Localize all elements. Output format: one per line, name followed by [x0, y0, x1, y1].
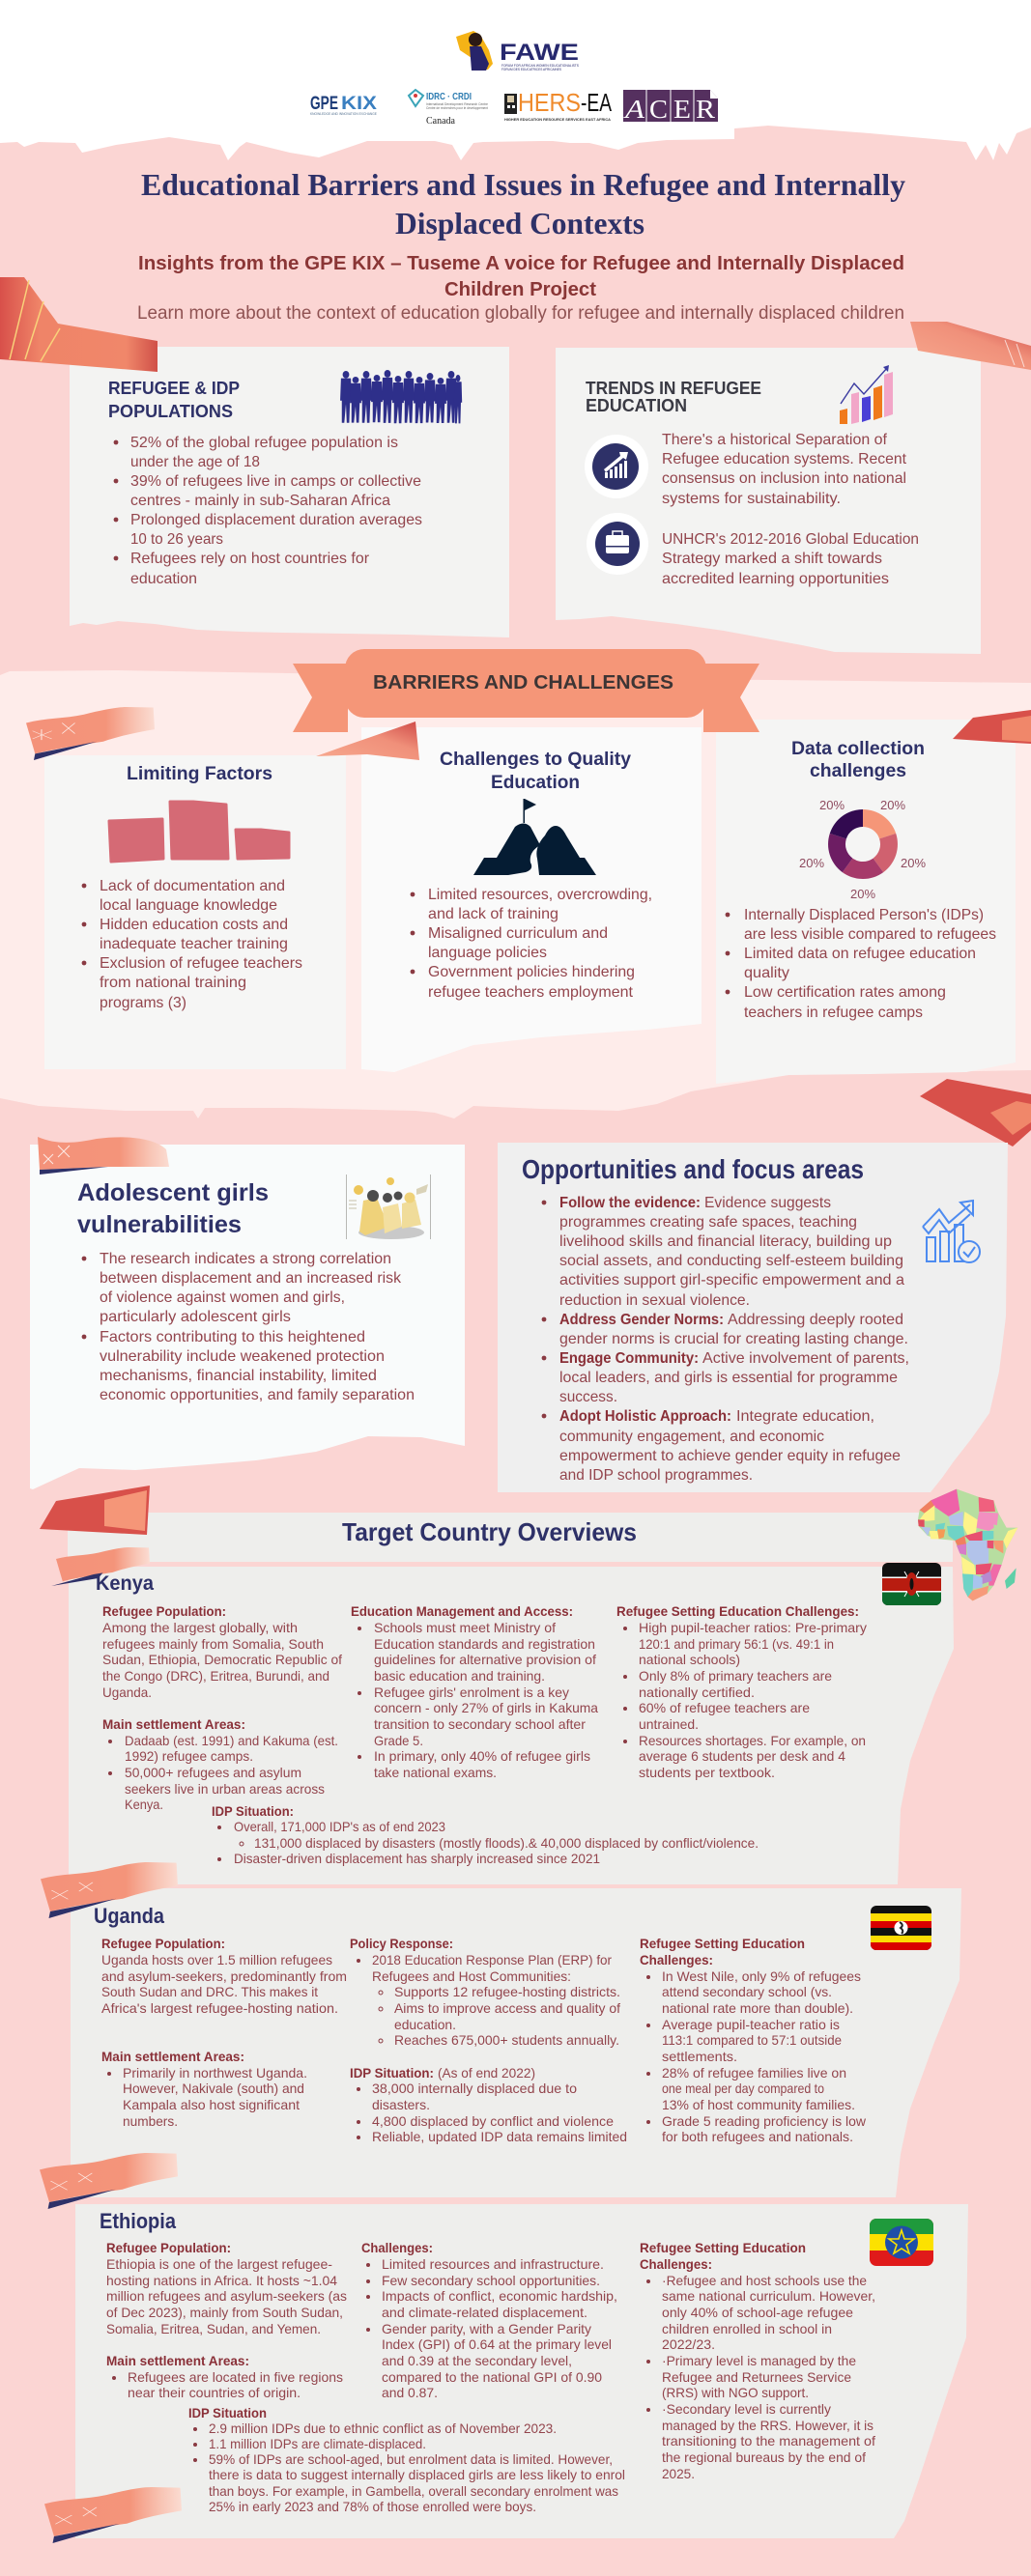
- heading: [586, 378, 761, 415]
- panel: opportunities and focus areas: [498, 1143, 1008, 1492]
- bullet list: economic opportunities, and family separation: [100, 1387, 415, 1403]
- column: policy response and IDP situation: Reaches 675,000+ students annually.: [394, 2033, 619, 2048]
- heading: Data collection: [791, 739, 925, 759]
- bullet list: centres - mainly in sub-Saharan Africa: [130, 493, 390, 509]
- column: refugee population and settlement: [101, 1937, 347, 2129]
- bullet list: [82, 1251, 415, 1403]
- logo: GPE KIX: GPE: [310, 94, 338, 114]
- icon: Kenya flag: [882, 1563, 941, 1605]
- heading: [77, 1179, 269, 1238]
- subtitle: [138, 253, 904, 300]
- bullet list: Prolonged displacement duration averages: [130, 512, 422, 528]
- column: education management and access: Education standards and registration: [374, 1637, 595, 1652]
- column: refugee setting challenges: the regional bureaus by the end of: [662, 2450, 866, 2465]
- column: refugee setting challenges: [640, 1937, 866, 2144]
- column: refugee setting challenges: 2022/23.: [662, 2337, 715, 2352]
- text: UNHCR strategy: [662, 531, 919, 587]
- column: policy response and IDP situation: Aims to improve access and quality of: [394, 2001, 620, 2016]
- icon: mountain with flag: [473, 799, 596, 875]
- bullet list: success.: [559, 1389, 617, 1405]
- column: refugee population and settlement: 1992) refugee camps.: [125, 1749, 253, 1764]
- column: challenges: and 0.87.: [382, 2386, 438, 2400]
- bullet list: livelihood skills and financial literacy, building up: [559, 1233, 892, 1250]
- bullet list: The research indicates a strong correlation: [100, 1251, 391, 1267]
- chart: donut: [799, 798, 926, 901]
- bullet list: [114, 435, 422, 587]
- column: refugee population and settlement: Uganda.: [102, 1685, 152, 1700]
- bullet list: [726, 907, 996, 1021]
- logo: IDRC CRDI Canada: Canada: [426, 116, 456, 127]
- column: refugee population and settlement: near their countries of origin.: [128, 2386, 301, 2400]
- column: refugee setting challenges: average 6 students per desk and 4: [639, 1749, 845, 1764]
- column: refugee setting challenges: High pupil-teacher ratios: Pre-primary: [639, 1621, 867, 1635]
- brush: Uganda corner: [41, 1862, 178, 1918]
- heading: Kenya: [96, 1572, 154, 1595]
- bullet list: programmes creating safe spaces, teaching: [559, 1214, 857, 1231]
- bullet list: [542, 1195, 909, 1484]
- heading: [791, 739, 925, 781]
- title: Displaced Contexts: [395, 206, 644, 241]
- column: refugee population and settlement: Main settlement Areas:: [101, 2050, 244, 2064]
- logo: HERS-EA: HIGHER EDUCATION RESOURCE SERVICES EAST AFRICA: [504, 117, 611, 122]
- bullet list: and IDP school programmes.: [559, 1467, 753, 1484]
- bullet list: Government policies hindering: [428, 964, 635, 980]
- icon: crowd silhouette: [340, 370, 462, 423]
- bullet list: vulnerability include weakened protection: [100, 1348, 385, 1365]
- column: education management and access: concern - only 27% of girls in Kakuma: [374, 1701, 598, 1715]
- column: education management and access: Schools must meet Ministry of: [374, 1621, 556, 1635]
- intro line: Learn more about the context of education globally for refugee and internally displaced children: [137, 303, 904, 324]
- column: challenges: and 0.39 at the secondary level,: [382, 2354, 572, 2368]
- column: refugee population and settlement: [106, 2241, 347, 2400]
- column: policy response and IDP situation: Supports 12 refugee-hosting districts.: [394, 1985, 620, 1999]
- column: refugee setting challenges: national rate more than double).: [662, 2001, 853, 2016]
- column: refugee population and settlement: However, Nakivale (south) and: [123, 2081, 304, 2096]
- panel: Ethiopia: [75, 2204, 968, 2538]
- donut labels: 20%: [799, 856, 824, 870]
- column: refugee setting challenges: Challenges:: [640, 1953, 713, 1967]
- column: refugee setting challenges: nationally certified.: [639, 1685, 755, 1700]
- column: refugee population and settlement: Refugees are located in five regions: [128, 2370, 343, 2385]
- bullet list: Refugees rely on host countries for: [130, 551, 370, 567]
- bullet list: Factors contributing to this heightened: [100, 1329, 365, 1345]
- brush: target red: [40, 1486, 150, 1535]
- column: refugee population and settlement: 50,000+ refugees and asylum: [125, 1766, 301, 1780]
- logo: GPE KIX: KIX: [341, 94, 377, 114]
- panel: Uganda: [71, 1888, 961, 2197]
- bullet list: quality: [744, 965, 789, 981]
- column: refugee setting challenges: [640, 2241, 875, 2481]
- heading: Education: [491, 773, 580, 793]
- heading: Uganda: [94, 1904, 165, 1928]
- title: Educational Barriers and Issues in Refugee and Internally: [141, 167, 905, 202]
- column: refugee population and settlement: Africa's largest refugee-hosting nation.: [101, 2001, 338, 2016]
- text: separation of systems: There's a historical Separation of: [662, 432, 888, 448]
- column: policy response and IDP situation: IDP Situation:: [350, 2066, 434, 2081]
- logo: HERS-EA: HERS: [518, 88, 581, 117]
- bullet list: teachers in refugee camps: [744, 1005, 923, 1021]
- column: refugee setting challenges: children enrolled in school in: [662, 2322, 832, 2336]
- brush: Kenya corner: [51, 1547, 150, 1586]
- block: IDP situation: 25% in early 2023 and 78% of those enrolled were boys.: [209, 2500, 536, 2514]
- column: refugee population and settlement: Refugee Population:: [106, 2241, 231, 2255]
- column: education management and access: [351, 1604, 598, 1780]
- column: refugee population and settlement: Ethiopia is one of the largest refugee-: [106, 2257, 332, 2272]
- column: refugee population and settlement: and asylum-seekers, predominantly from: [101, 1969, 347, 1984]
- logo: FAWE: FAWE: [500, 40, 579, 66]
- bullet list: 39% of refugees live in camps or collective: [130, 473, 421, 490]
- block: IDP situation: there is data to suggest internally displaced girls are less likely to enrol: [209, 2468, 625, 2482]
- logo: HERS-EA: -EA: [581, 88, 612, 117]
- column: education management and access: take national exams.: [374, 1766, 497, 1780]
- brush: limiting factors: [26, 707, 155, 760]
- heading: Target Country Overviews: [342, 1517, 637, 1546]
- icon: Uganda flag: [871, 1906, 931, 1950]
- brush: challenges corner: [316, 722, 419, 760]
- column: challenges: and climate-related displacement.: [382, 2306, 587, 2320]
- logo: FAWE: [456, 31, 580, 71]
- bullet list: Limited data on refugee education: [744, 946, 976, 962]
- column: policy response and IDP situation: (As of end 2022): [438, 2066, 535, 2081]
- text: separation of systems: consensus on inclusion into national: [662, 470, 906, 487]
- column: refugee population and settlement: numbers.: [123, 2114, 178, 2129]
- heading: Adolescent girls: [77, 1179, 269, 1206]
- bullet list: mechanisms, financial instability, limited: [100, 1368, 377, 1384]
- section banner: barriers and challenges: BARRIERS AND CHALLENGES: [373, 672, 673, 694]
- column: refugee population and settlement: of Dec 2023), mainly from South Sudan,: [106, 2306, 343, 2320]
- logo: IDRC CRDI Canada: [409, 90, 488, 127]
- bullet list: social assets, and conducting self-esteem building: [559, 1253, 903, 1269]
- bullet list: 10 to 26 years: [130, 531, 223, 548]
- bullet list: [411, 887, 652, 1001]
- column: refugee setting challenges: 28% of refugee families live on: [662, 2066, 846, 2081]
- subtitle: Insights from the GPE KIX – Tuseme A voice for Refugee and Internally Displaced: [138, 253, 904, 274]
- logo: FAWE: FORUM DES EDUCATRICES AFRICAINES: [501, 68, 562, 71]
- panel: trends in refugee education: [556, 348, 981, 654]
- bullet list: local leaders, and girls is essential for programme: [559, 1370, 898, 1386]
- column: refugee setting challenges: ·Secondary level is currently: [662, 2402, 831, 2417]
- column: refugee setting challenges: 113:1 compared to 57:1 outside: [662, 2033, 842, 2048]
- logo: ACER: R: [696, 95, 715, 124]
- brush: adolescent corner: [38, 1137, 169, 1175]
- bullet list: Address Gender Norms:: [559, 1312, 724, 1328]
- block: IDP situation: than boys. For example, in Gambella, overall secondary enrolment was: [209, 2484, 618, 2499]
- logo: FAWE: FORUM FOR AFRICAN WOMEN EDUCATIONALISTS: [501, 64, 580, 68]
- column: challenges: Gender parity, with a Gender Parity: [382, 2322, 591, 2336]
- chart: three block bars: [109, 802, 289, 862]
- column: refugee population and settlement: South Sudan and DRC. This makes it: [101, 1985, 318, 1999]
- logo: IDRC CRDI Canada: Centre de recherches pour le développement: [426, 106, 488, 110]
- column: refugee setting challenges: Challenges:: [640, 2257, 712, 2272]
- bullet list: Exclusion of refugee teachers: [100, 955, 302, 972]
- donut labels: 20%: [901, 856, 926, 870]
- icon: seated girls illustration: [346, 1175, 431, 1239]
- logo: ACER: C: [649, 95, 668, 124]
- subtitle: Children Project: [444, 279, 596, 300]
- column: policy response and IDP situation: Refugees and Host Communities:: [372, 1969, 571, 1984]
- icon: Africa map: [918, 1489, 1017, 1600]
- logo: GPE KIX: [310, 94, 378, 116]
- block: IDP situation: Overall, 171,000 IDP's as of end 2023: [234, 1820, 445, 1834]
- bullet list: Evidence suggests: [704, 1195, 831, 1211]
- column: refugee setting challenges: one meal per day compared to: [662, 2081, 824, 2096]
- column: refugee setting challenges: (RRS) with NGO support.: [662, 2386, 809, 2400]
- panel: challenges to quality education: [361, 727, 702, 1072]
- heading: Limiting Factors: [127, 764, 272, 784]
- column: refugee population and settlement: Uganda hosts over 1.5 million refugees: [101, 1953, 332, 1967]
- donut labels: [799, 798, 926, 901]
- column: challenges: Challenges:: [361, 2241, 433, 2255]
- column: policy response and IDP situation: Reliable, updated IDP data remains limited: [372, 2130, 627, 2144]
- bullet list: Addressing deeply rooted: [728, 1312, 903, 1328]
- icon: growth bar chart: [840, 365, 893, 424]
- bullet list: refugee teachers employment: [428, 984, 634, 1001]
- column: challenges: Index (GPI) of 0.64 at the primary level: [382, 2337, 612, 2352]
- column: refugee population and settlement: Kenya.: [125, 1798, 163, 1812]
- title: [141, 167, 905, 241]
- brush: top left: [0, 277, 158, 372]
- block: IDP situation: [212, 1804, 759, 1866]
- donut labels: 20%: [850, 887, 875, 901]
- column: refugee setting challenges: ·Primary level is managed by the: [662, 2354, 856, 2368]
- logo: ACER: A: [623, 95, 645, 124]
- pale torn band behind barriers section: [0, 670, 1031, 1118]
- bullet list: 52% of the global refugee population is: [130, 435, 398, 451]
- bullet list: from national training: [100, 975, 246, 991]
- donut labels: 20%: [819, 798, 845, 812]
- heading: vulnerabilities: [77, 1211, 242, 1238]
- logo: ACER: E: [673, 95, 691, 124]
- block: IDP situation: [188, 2406, 625, 2514]
- heading: Challenges to Quality: [440, 750, 631, 770]
- panel: adolescent girls vulnerabilities: [30, 1145, 465, 1489]
- text: UNHCR strategy: accredited learning opportunities: [662, 571, 889, 587]
- column: policy response and IDP situation: 4,800 displaced by conflict and violence: [372, 2114, 614, 2129]
- column: education management and access: transition to secondary school after: [374, 1717, 586, 1732]
- column: refugee setting challenges: Grade 5 reading proficiency is low: [662, 2114, 866, 2129]
- column: refugee setting challenges: transitioning to the management of: [662, 2434, 875, 2449]
- column: refugee setting challenges: students per textbook.: [639, 1766, 775, 1780]
- column: policy response and IDP situation: disasters.: [372, 2098, 430, 2112]
- column: refugee population and settlement: Dadaab (est. 1991) and Kakuma (est.: [125, 1734, 338, 1748]
- column: refugee setting challenges: In West Nile, only 9% of refugees: [662, 1969, 861, 1984]
- column: policy response and IDP situation: [350, 1937, 627, 2144]
- column: education management and access: In primary, only 40% of refugee girls: [374, 1749, 590, 1764]
- column: policy response and IDP situation: education.: [394, 2018, 456, 2032]
- bullet list: empowerment to achieve gender equity in refugee: [559, 1448, 901, 1464]
- column: refugee setting challenges: Refugee Setting Education: [640, 1937, 805, 1951]
- column: refugee setting challenges: 13% of host community families.: [662, 2098, 855, 2112]
- column: refugee setting challenges: managed by the RRS. However, it is: [662, 2419, 873, 2433]
- column: refugee population and settlement: Refugee Population:: [101, 1937, 225, 1951]
- heading: challenges: [810, 761, 906, 781]
- column: refugee setting challenges: Refugee and Returnees Service: [662, 2370, 851, 2385]
- bullet list: programs (3): [100, 995, 186, 1011]
- column: refugee population and settlement: Refugee Population:: [102, 1604, 226, 1619]
- bullet list: and lack of training: [428, 906, 558, 922]
- logo: HERS-EA: [504, 88, 612, 122]
- text: separation of systems: systems for sustainability.: [662, 491, 841, 507]
- column: refugee setting challenges: attend secondary school (vs.: [662, 1985, 832, 1999]
- column: refugee setting challenges: [616, 1604, 867, 1780]
- column: refugee population and settlement: Among the largest globally, with: [102, 1621, 298, 1635]
- bullet list: local language knowledge: [100, 897, 277, 914]
- heading: TRENDS IN REFUGEE: [586, 378, 761, 398]
- bullet list: under the age of 18: [130, 454, 260, 470]
- bullet list: Limited resources, overcrowding,: [428, 887, 652, 903]
- column: challenges: Limited resources and infrastructure.: [382, 2257, 604, 2272]
- column: refugee setting challenges: for both refugees and nationals.: [662, 2130, 853, 2144]
- column: policy response and IDP situation: 38,000 internally displaced due to: [372, 2081, 577, 2096]
- column: refugee population and settlement: Primarily in northwest Uganda.: [123, 2066, 307, 2081]
- column: challenges: Few secondary school opportunities.: [382, 2274, 600, 2288]
- block: IDP situation: IDP Situation:: [212, 1804, 294, 1819]
- bullet list: Adopt Holistic Approach:: [559, 1408, 731, 1425]
- logo: IDRC CRDI Canada: International Development Research Centre: [426, 102, 488, 106]
- brush: top right: [910, 322, 1031, 370]
- column: refugee population and settlement: hosting nations in Africa. It hosts ~1.04: [106, 2274, 337, 2288]
- bullet list: Lack of documentation and: [100, 878, 285, 894]
- column: refugee setting challenges: Only 8% of primary teachers are: [639, 1669, 832, 1684]
- column: refugee setting challenges: settlements.: [662, 2050, 737, 2064]
- donut labels: 20%: [880, 798, 905, 812]
- bullet list: between displacement and an increased risk: [100, 1270, 402, 1287]
- column: refugee population and settlement: refugees mainly from Somalia, South: [102, 1637, 324, 1652]
- bullet list: of violence against women and girls,: [100, 1289, 345, 1306]
- column: challenges: Impacts of conflict, economic hardship,: [382, 2289, 617, 2304]
- text: separation of systems: [662, 432, 907, 507]
- block: IDP situation: 131,000 displaced by disasters (mostly floods).& 40,000 displaced by conflict/violence.: [254, 1836, 759, 1851]
- bullet list: activities support girl-specific empowerment and a: [559, 1272, 904, 1288]
- column: challenges: [361, 2241, 617, 2400]
- bullet list: reduction in sexual violence.: [559, 1292, 750, 1309]
- bullet list: inadequate teacher training: [100, 936, 288, 952]
- column: refugee population and settlement: [102, 1604, 342, 1812]
- bullet list: language policies: [428, 945, 547, 961]
- logo strip: [310, 31, 718, 127]
- column: policy response and IDP situation: Policy Response:: [350, 1937, 453, 1951]
- bullet list: [82, 878, 302, 1011]
- column: education management and access: Grade 5.: [374, 1734, 423, 1748]
- column: refugee setting challenges: 120:1 and primary 56:1 (vs. 49:1 in: [639, 1637, 834, 1652]
- icon: Ethiopia flag: [870, 2219, 933, 2266]
- panel: target country overviews header: [68, 1513, 953, 1562]
- column: refugee population and settlement: seekers live in urban areas across: [125, 1782, 325, 1797]
- heading: POPULATIONS: [108, 401, 233, 421]
- panel: data collection challenges: [716, 720, 1016, 1084]
- bullet list: Hidden education costs and: [100, 917, 288, 933]
- column: refugee setting challenges: national schools): [639, 1653, 740, 1667]
- column: education management and access: guidelines for alternative provision of: [374, 1653, 596, 1667]
- column: education management and access: Refugee girls' enrolment is a key: [374, 1685, 569, 1700]
- heading: REFUGEE & IDP: [108, 378, 240, 398]
- heading: Opportunities and focus areas: [522, 1154, 864, 1184]
- column: education management and access: basic education and training.: [374, 1669, 545, 1684]
- bullet list: particularly adolescent girls: [100, 1309, 291, 1325]
- logo: GPE KIX: KNOWLEDGE AND INNOVATION EXCHANGE: [310, 112, 378, 116]
- column: refugee setting challenges: ·Refugee and host schools use the: [662, 2274, 867, 2288]
- block: IDP situation: 1.1 million IDPs are climate-displaced.: [209, 2437, 426, 2451]
- bullet list: Integrate education,: [736, 1408, 874, 1425]
- panel: Kenya: [69, 1567, 954, 1884]
- white header area with torn edge: [0, 0, 1031, 160]
- heading: Ethiopia: [100, 2209, 177, 2233]
- bullet list: Low certification rates among: [744, 984, 946, 1001]
- column: refugee setting challenges: untrained.: [639, 1717, 699, 1732]
- column: refugee population and settlement: the Congo (DRC), Eritrea, Burundi, and: [102, 1669, 329, 1684]
- column: refugee setting challenges: Refugee Setting Education: [640, 2241, 806, 2255]
- text: separation of systems: Refugee education systems. Recent: [662, 451, 907, 467]
- column: refugee population and settlement: Somalia, Eritrea, Sudan, and Yemen.: [106, 2322, 321, 2336]
- block: IDP situation: IDP Situation: [188, 2406, 267, 2420]
- icon: growth chart badge: [585, 435, 648, 498]
- icon: briefcase badge: [587, 513, 648, 575]
- brush: Uganda bottom: [40, 2153, 178, 2209]
- column: refugee population and settlement: Main settlement Areas:: [102, 1717, 245, 1732]
- bullet list: education: [130, 571, 197, 587]
- column: refugee setting challenges: Refugee Setting Education Challenges:: [616, 1604, 859, 1619]
- bullet list: Follow the evidence:: [559, 1195, 701, 1211]
- column: challenges: compared to the national GPI of 0.90: [382, 2370, 602, 2385]
- bullet list: Engage Community:: [559, 1350, 699, 1367]
- bullet list: community engagement, and economic: [559, 1429, 824, 1445]
- heading: [108, 378, 240, 421]
- bullet list: Active involvement of parents,: [702, 1350, 909, 1367]
- logo: IDRC CRDI Canada: IDRC · CRDI: [426, 92, 472, 102]
- column: refugee setting challenges: only 40% of school-age refugee: [662, 2306, 853, 2320]
- bullet list: gender norms is crucial for creating lasting change.: [559, 1331, 908, 1347]
- column: refugee population and settlement: Sudan, Ethiopia, Democratic Republic of: [102, 1653, 342, 1667]
- text: UNHCR strategy: Strategy marked a shift towards: [662, 551, 882, 567]
- brush: right red: [920, 1079, 1031, 1146]
- column: refugee setting challenges: 2025.: [662, 2467, 695, 2481]
- block: IDP situation: 59% of IDPs are school-aged, but enrolment data is limited. However,: [209, 2452, 613, 2467]
- section banner: barriers and challenges: [293, 649, 759, 732]
- bullet list: Misaligned curriculum and: [428, 925, 608, 942]
- column: refugee population and settlement: million refugees and asylum-seekers (as: [106, 2289, 347, 2304]
- brush: data corner: [953, 710, 1031, 744]
- brush: Ethiopia bottom: [44, 2487, 182, 2543]
- logo: ACER: [623, 90, 718, 124]
- bullet list: are less visible compared to refugees: [744, 926, 996, 943]
- column: refugee population and settlement: Main settlement Areas:: [106, 2354, 249, 2368]
- panel: limiting factors: [44, 755, 346, 1069]
- column: refugee setting challenges: same national curriculum. However,: [662, 2289, 875, 2304]
- heading: [440, 750, 631, 793]
- block: IDP situation: 2.9 million IDPs due to ethnic conflict as of November 2023.: [209, 2421, 557, 2436]
- text: UNHCR strategy: UNHCR's 2012-2016 Global Education: [662, 531, 919, 548]
- bullet list: Internally Displaced Person's (IDPs): [744, 907, 984, 923]
- column: policy response and IDP situation: 2018 Education Response Plan (ERP) for: [372, 1953, 612, 1967]
- column: refugee setting challenges: 60% of refugee teachers are: [639, 1701, 810, 1715]
- heading: EDUCATION: [586, 395, 687, 415]
- icon: blue chart with check: [923, 1201, 980, 1262]
- panel: refugee and IDP populations: [70, 347, 509, 637]
- column: education management and access: Education Management and Access:: [351, 1604, 573, 1619]
- block: IDP situation: Disaster-driven displacement has sharply increased since 2021: [234, 1852, 600, 1866]
- column: refugee population and settlement: Kampala also host significant: [123, 2098, 300, 2112]
- column: refugee setting challenges: Average pupil-teacher ratio is: [662, 2018, 840, 2032]
- column: refugee setting challenges: Resources shortages. For example, on: [639, 1734, 866, 1748]
